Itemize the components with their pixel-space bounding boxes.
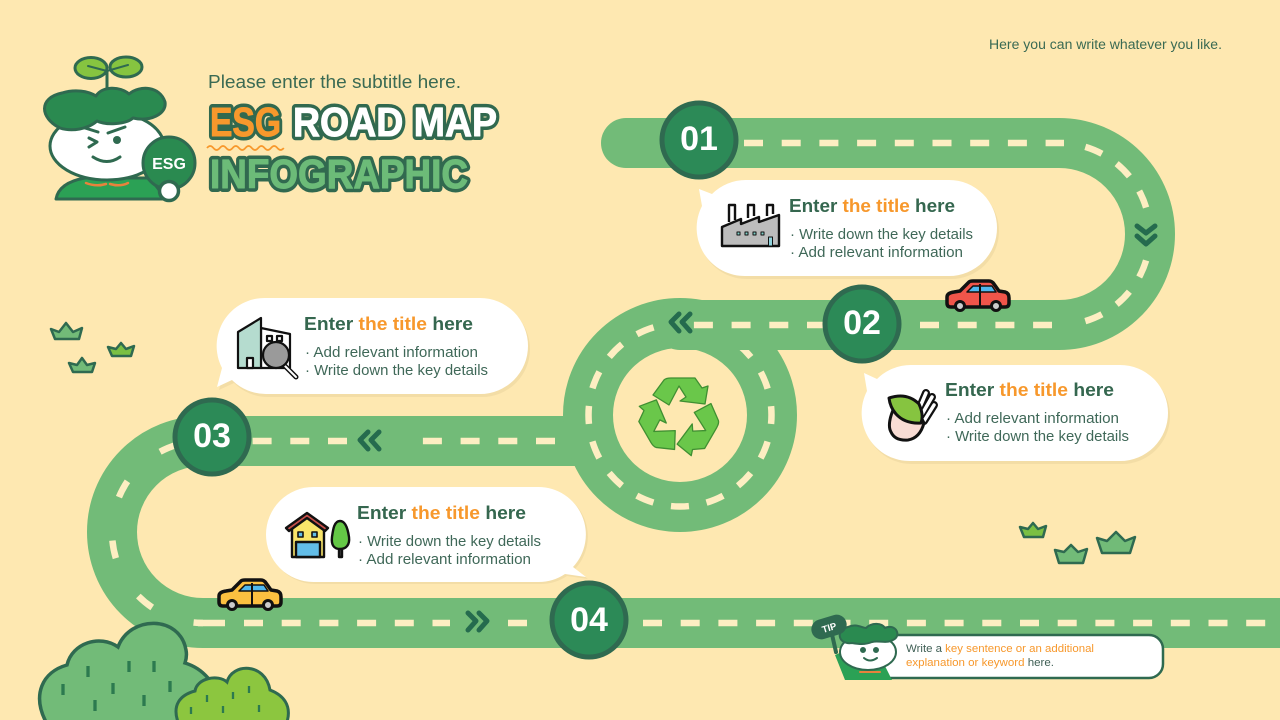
step 03 details: · Write down the key details bbox=[305, 362, 488, 379]
step 04 details bbox=[358, 533, 541, 568]
step 01 details: · Add relevant information bbox=[790, 244, 963, 261]
icon: red car bbox=[947, 281, 1009, 310]
tip text bbox=[906, 643, 1094, 669]
icon: house and tree bbox=[286, 513, 349, 557]
title: INFOGRAPHIC bbox=[210, 151, 468, 197]
icon: yellow car bbox=[219, 580, 281, 610]
number badge 03 bbox=[175, 400, 249, 474]
number badge 02 bbox=[825, 287, 899, 361]
title: INFOGRAPHIC bbox=[210, 151, 468, 197]
title: ESG bbox=[210, 99, 281, 145]
step 02 heading: Enter the title here bbox=[945, 380, 1114, 400]
tip mascot bbox=[810, 613, 897, 680]
icon: hand holding leaf bbox=[889, 393, 934, 440]
icon: buildings with magnifier bbox=[238, 318, 296, 377]
step 01 details: · Write down the key details bbox=[790, 226, 973, 243]
icon: factory bbox=[722, 205, 779, 246]
bushes bbox=[40, 623, 288, 720]
direction arrows bbox=[360, 226, 1155, 630]
number badge 04: 04 bbox=[570, 601, 608, 639]
icon: recycling symbol bbox=[632, 378, 726, 460]
step 02 details bbox=[946, 410, 1129, 445]
mascot: ESG sprout character bbox=[44, 57, 195, 200]
panel: step 02 bbox=[862, 365, 1170, 464]
tip text: explanation or keyword here. bbox=[906, 657, 1054, 669]
subtitle: Please enter the subtitle here. bbox=[208, 72, 461, 92]
title bbox=[207, 99, 497, 197]
step 01 heading: Enter the title here bbox=[789, 196, 955, 216]
number badge 01: 01 bbox=[680, 120, 718, 158]
title: ROAD MAP bbox=[293, 99, 497, 145]
number badge 02: 02 bbox=[843, 304, 881, 342]
step 04 details: · Write down the key details bbox=[358, 533, 541, 550]
title: ROAD MAP bbox=[293, 99, 497, 145]
big bush bbox=[40, 623, 230, 720]
step 04 heading: Enter the title here bbox=[357, 503, 526, 523]
step 04 details: · Add relevant information bbox=[358, 551, 531, 568]
tip box bbox=[870, 635, 1163, 678]
panel: step 01 bbox=[697, 180, 999, 279]
road bbox=[112, 143, 1280, 623]
mascot: ESG sprout character: ESG bbox=[152, 156, 186, 173]
grass tufts bbox=[51, 323, 1135, 563]
wavy underline bbox=[207, 146, 284, 150]
panel: step 04 bbox=[266, 487, 588, 584]
step 03 details bbox=[305, 344, 488, 379]
callout: tip bbox=[810, 613, 1163, 680]
step 02 details: · Write down the key details bbox=[946, 428, 1129, 445]
number badge 03: 03 bbox=[193, 417, 231, 455]
tip mascot: TIP bbox=[821, 621, 839, 636]
title: ESG bbox=[210, 99, 281, 145]
top right note: Here you can write whatever you like. bbox=[989, 37, 1222, 52]
step 03 details: · Add relevant information bbox=[305, 344, 478, 361]
number badge 04 bbox=[552, 583, 626, 657]
small bush bbox=[176, 668, 288, 720]
tip text: Write a key sentence or an additional bbox=[906, 643, 1094, 655]
step 01 details bbox=[790, 226, 973, 261]
number badge 01 bbox=[662, 103, 736, 177]
step 03 heading: Enter the title here bbox=[304, 314, 473, 334]
step 02 details: · Add relevant information bbox=[946, 410, 1119, 427]
panel: step 03 bbox=[217, 298, 530, 397]
